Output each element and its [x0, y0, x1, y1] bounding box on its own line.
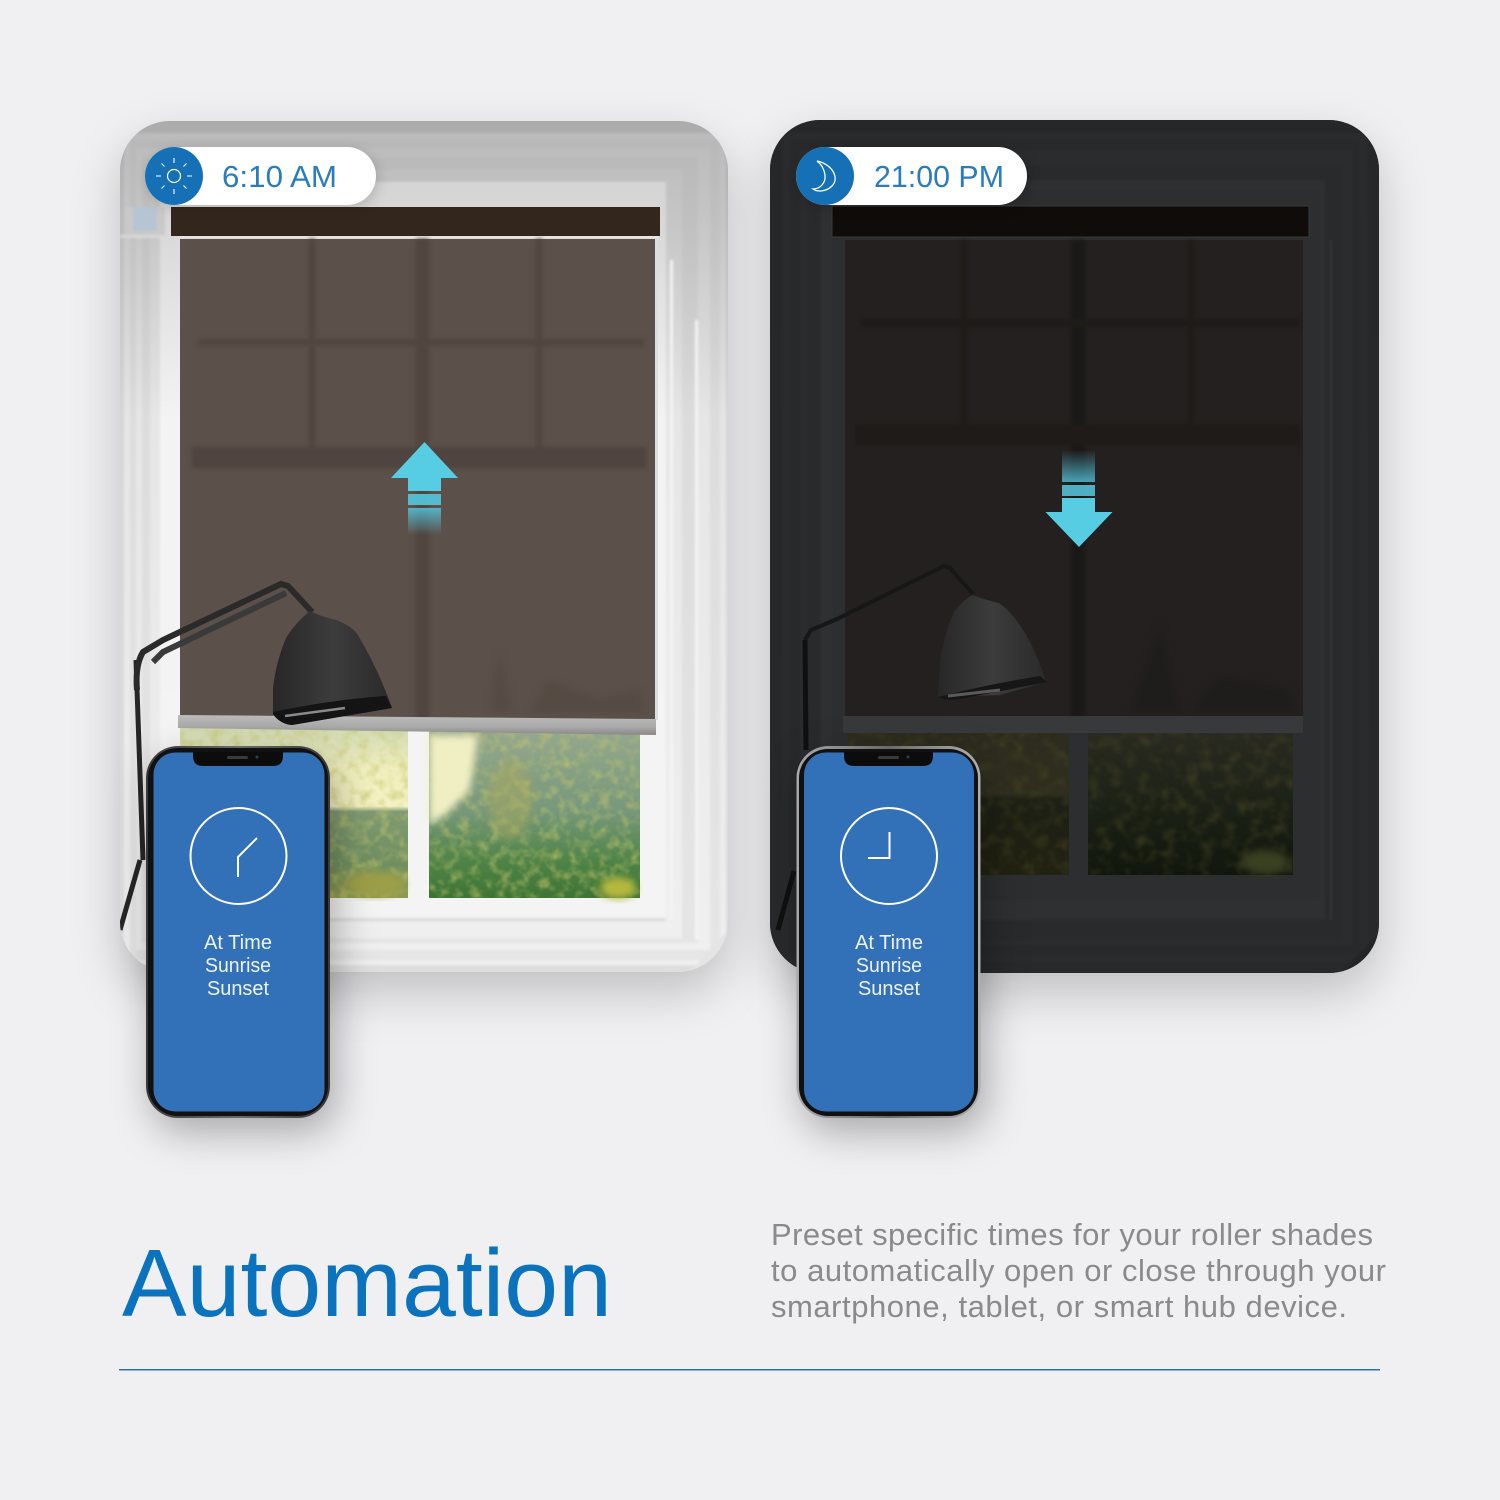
- description text: to automatically open or close through your: [771, 1253, 1386, 1288]
- schedule options: At Time: [855, 932, 923, 954]
- schedule options: At Time: [204, 932, 272, 954]
- shade hem bar: [178, 715, 656, 735]
- phone: night schedule: [796, 746, 980, 1118]
- panel: morning window: [100, 100, 750, 990]
- floor lamp: [778, 566, 1047, 930]
- window frame, light: [120, 121, 728, 972]
- description text: Preset specific times for your roller shades: [771, 1217, 1373, 1252]
- icon: clock at 6:10: [190, 808, 286, 904]
- shade hem bar: [843, 716, 1303, 733]
- time label: 6:10 AM: 6:10 AM: [222, 159, 337, 194]
- roller shade valance: [171, 207, 660, 236]
- time pill: night: [796, 147, 1027, 205]
- window glass: dusk trees: [848, 725, 1293, 875]
- window glass: meadow and trees: [180, 725, 640, 899]
- icon: clock at 21:00: [841, 808, 937, 904]
- phone notch: [193, 752, 283, 766]
- description text: smartphone, tablet, or smart hub device.: [771, 1289, 1347, 1324]
- arrow: shade rising: [391, 442, 458, 535]
- title: Automation: [122, 1230, 612, 1337]
- schedule options: Sunrise: [205, 955, 271, 977]
- floor lamp: [120, 584, 392, 930]
- arrow: shade lowering: [1046, 450, 1112, 547]
- phone: morning schedule: [146, 746, 330, 1118]
- schedule options: [204, 932, 272, 1000]
- schedule options: [855, 932, 923, 1000]
- roller shade fabric: [180, 236, 658, 720]
- icon: sun: [145, 147, 203, 205]
- description text: [771, 1217, 1386, 1324]
- schedule options: Sunset: [207, 978, 269, 1000]
- time pill: morning: [145, 147, 376, 205]
- panel: night window: [750, 100, 1400, 990]
- icon: moon: [796, 147, 854, 205]
- schedule options: Sunrise: [856, 955, 922, 977]
- roller shade valance: [832, 206, 1309, 237]
- roller shade fabric: [845, 240, 1303, 718]
- schedule options: Sunset: [858, 978, 920, 1000]
- phone notch: [844, 752, 933, 766]
- window frame, dark: [770, 120, 1379, 973]
- time label: 21:00 PM: 21:00 PM: [874, 159, 1004, 194]
